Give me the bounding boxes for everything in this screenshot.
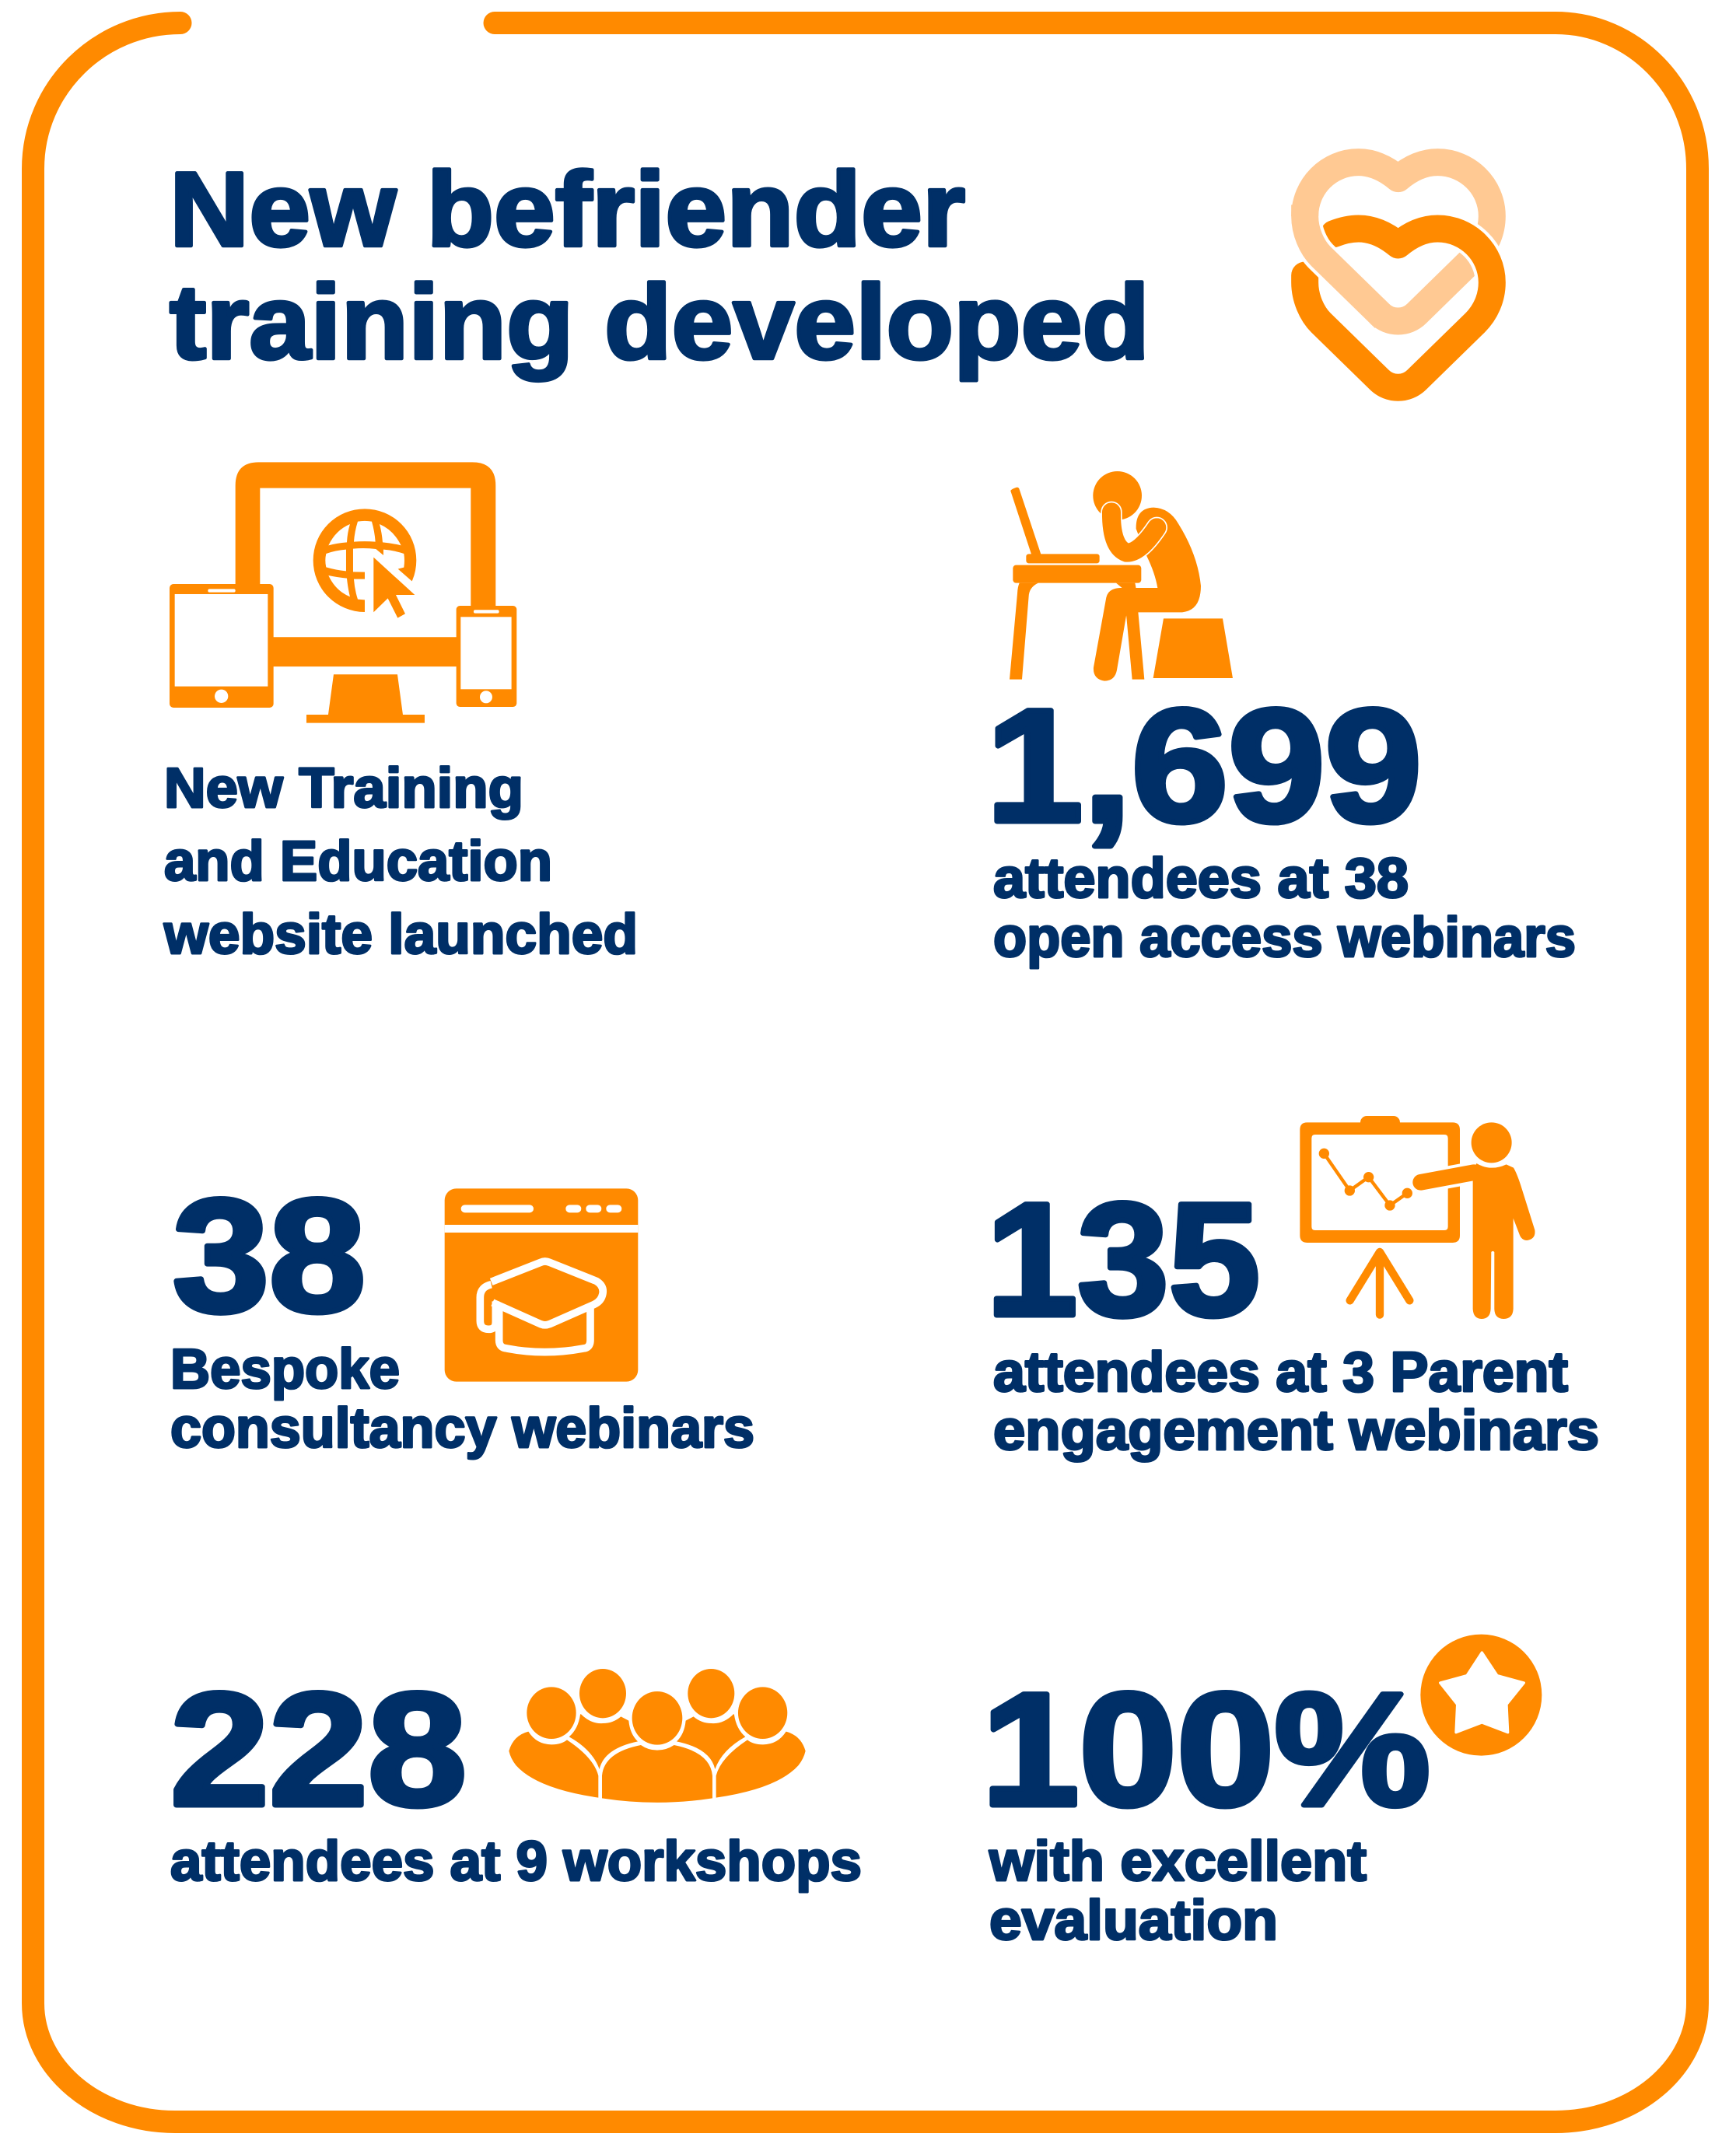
stat: 100% excellent evaluation: evaluation [989,1890,1278,1952]
stat: 228 attendees [170,1660,862,1893]
stat: 38 bespoke webinars [170,1166,754,1460]
stat: 38 bespoke webinars: 38 [173,1166,366,1345]
icon: star badge [1420,1635,1542,1756]
stat: 1,699 attendees [986,676,1576,969]
stat: 135 attendees: engagement webinars [993,1400,1599,1462]
text: new training website: New Training [164,757,523,820]
stat: 100% excellent evaluation [982,1660,1430,1952]
title: training developed [170,263,1150,381]
stat: 228 attendees: attendees at 9 workshops [170,1831,862,1893]
icon: devices with globe [170,462,516,723]
icon: browser with graduation cap [445,1188,638,1382]
stat: 135 attendees [986,1170,1599,1462]
stat: 100% excellent evaluation: 100% [982,1660,1430,1839]
icon: person at laptop [1010,471,1233,681]
stat: 1,699 attendees: 1,699 [986,676,1422,855]
stat: 100% excellent evaluation: with excellent [989,1831,1367,1893]
stat: 135 attendees: 135 [986,1170,1260,1349]
text: new training website: website launched [163,904,638,966]
title [170,150,1150,381]
icon: group of people [509,1669,806,1803]
icon: presenter with chart board [1300,1116,1535,1319]
text: new training website: and Education [164,831,552,893]
stat: 135 attendees: attendees at 3 Parent [993,1341,1568,1404]
stat: 1,699 attendees: open access webinars [993,907,1576,969]
stat: 228 attendees: 228 [170,1660,467,1839]
text: new training website [163,757,638,966]
stat: 38 bespoke webinars: Bespoke [170,1338,400,1401]
stat: 38 bespoke webinars: consultancy webinars [170,1397,754,1460]
icon: interlocking hearts [1305,163,1492,387]
stat: 1,699 attendees: attendees at 38 [993,848,1409,910]
title: New befriender [170,150,965,268]
